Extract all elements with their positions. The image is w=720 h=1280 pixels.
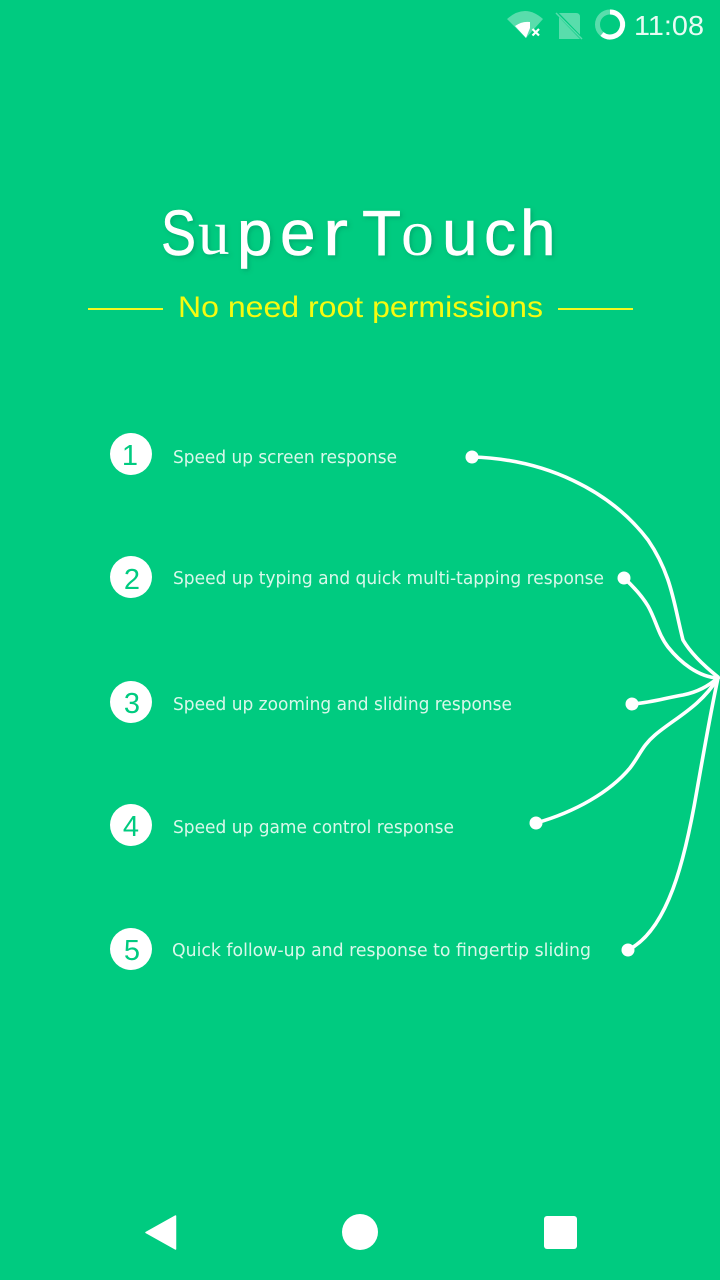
item 4: Speed up game control response (173, 817, 454, 838)
title (161, 197, 556, 270)
title: e (280, 197, 316, 269)
curve 5 (622, 678, 718, 956)
item 1: Speed up screen response (173, 447, 397, 468)
icon: battery ring (598, 12, 623, 37)
curve 3 (626, 678, 718, 710)
title: u (198, 198, 230, 268)
item 1 (110, 433, 397, 475)
item 1: 1 (122, 440, 138, 472)
item 5: Quick follow-up and response to fingertip sliding (172, 940, 591, 961)
item 3: Speed up zooming and sliding response (173, 694, 512, 715)
subtitle: No need root permissions (178, 291, 543, 324)
clock: 11:08 (634, 10, 704, 41)
title: h (520, 197, 556, 269)
title: o (401, 197, 434, 270)
item 2: Speed up typing and quick multi-tapping response (173, 568, 604, 589)
item 2 (110, 556, 604, 598)
icon: wifi off (507, 11, 543, 38)
title: T (362, 197, 401, 269)
item 3: 3 (124, 688, 140, 720)
title: r (323, 197, 348, 269)
item 5: 5 (124, 935, 140, 967)
status bar (507, 10, 704, 41)
icon: no sim (555, 11, 584, 41)
title: c (484, 197, 516, 269)
item 4: 4 (123, 811, 139, 843)
icon: recents (544, 1216, 577, 1249)
item 5 (110, 928, 591, 970)
connector curves (466, 450, 718, 956)
item 4 (110, 804, 454, 846)
title: p (237, 197, 273, 269)
item 3 (110, 681, 512, 723)
icon: back (146, 1216, 176, 1249)
title: S (161, 197, 196, 269)
curve 1 (466, 450, 718, 677)
item 2: 2 (124, 564, 140, 596)
title: u (442, 197, 478, 269)
curve 4 (530, 678, 718, 830)
curve 2 (618, 572, 718, 678)
icon: home (342, 1214, 378, 1250)
navigation bar (146, 1214, 577, 1250)
